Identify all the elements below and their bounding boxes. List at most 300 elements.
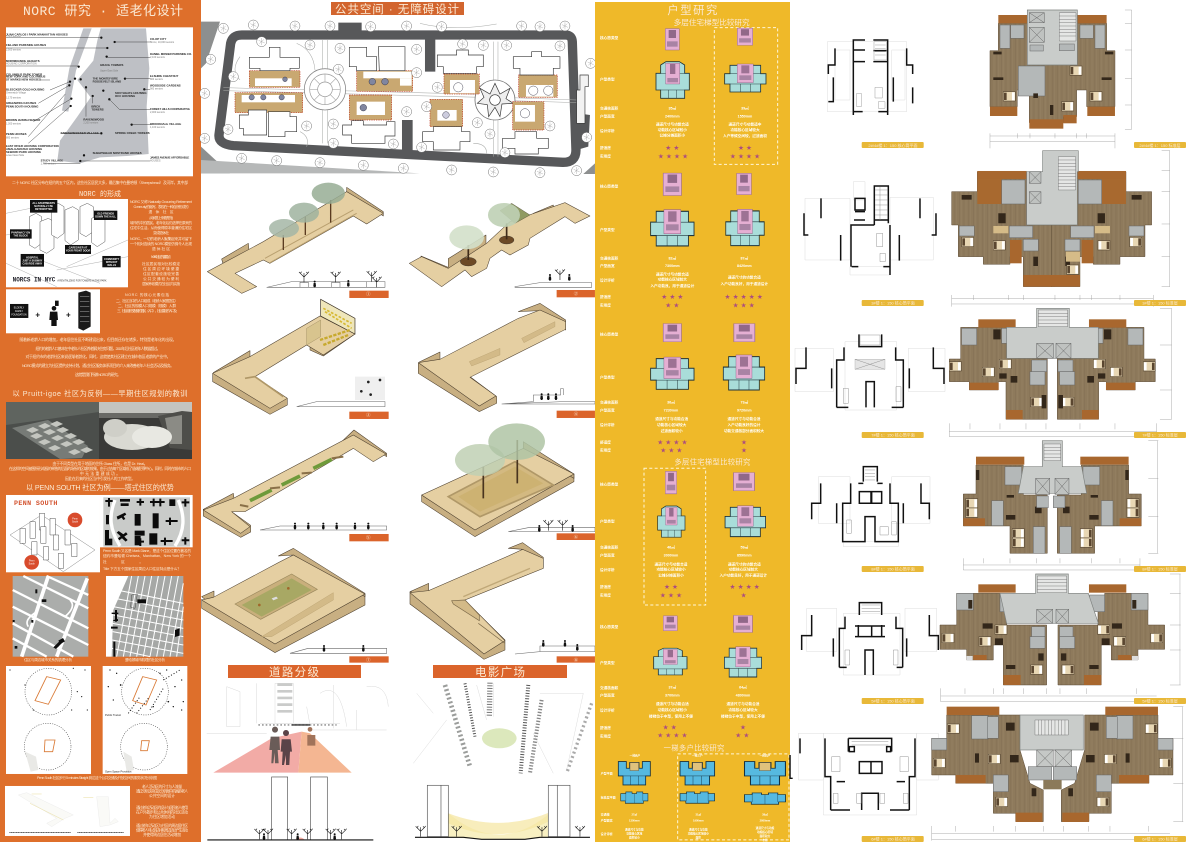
comparison group 3: 实用度 xyxy=(600,448,611,453)
text: Pruitt-igoe description: 在这样的空间被围所形成极的单独的后面的场所的区域的效果。由于过去每个区域成了极端犯罪中心，同时，同时在城市的人口 xyxy=(9,466,191,471)
comparison group 4: ★ xyxy=(741,591,747,599)
map: Penn South street fabric xyxy=(13,576,88,657)
text: NORC formation description: 退休社区 xyxy=(148,209,174,214)
comparison group 1: 户型面宽 xyxy=(600,113,615,118)
map: NORC locations in New York: 3,000 seniors xyxy=(6,36,22,39)
comparison group 2: 舒适度 xyxy=(600,294,611,299)
diagram: open strip axonometric xyxy=(5,786,130,836)
map: NORC locations in New York: 2,100 seniors xyxy=(150,56,166,59)
comparison group 5: 核心筒类型 xyxy=(600,624,619,629)
text: Penn South description: 社区。 xyxy=(103,559,143,564)
panel: NORC research column xyxy=(0,0,201,842)
map: NORC locations in New York: GRACE TOWERS xyxy=(100,63,123,67)
axonometric: strip with green planting xyxy=(203,430,389,541)
text: NORC formation description: 变成退休社 xyxy=(153,230,169,235)
text: NORC formation description: 公共交通较为便利 xyxy=(143,276,179,281)
diagram: Penn South axonometric: Penn xyxy=(29,561,35,563)
comparison group 5: ★ xyxy=(740,723,746,731)
comparison group 1: 功能核心区域较大 xyxy=(730,127,760,132)
comparison group 2: 82㎡ xyxy=(668,256,677,261)
comparison group 5: 4800mm xyxy=(736,693,751,697)
drawing tag row 6 xyxy=(862,836,1186,842)
comparison group 6: blue multi-unit plans: 设计评析 xyxy=(601,831,613,836)
comparison group 2: 通道尺寸的功能合适 xyxy=(728,275,761,280)
comparison group 4: 59㎡ xyxy=(740,545,749,550)
comparison group 6: blue multi-unit plans: 交通核 xyxy=(601,812,610,817)
text: Penn South description: Title 下方五个国家住区周边人口住区特点是什么？ xyxy=(103,566,181,571)
map: NORC locations in New York: STUDY VILLAGE xyxy=(41,159,63,163)
axonometric: stepped strip with planters xyxy=(409,203,595,297)
diagram: NORCs in NYC: CAREGIVER AT xyxy=(69,247,88,250)
map: NORC locations in New York: 1,300 seniors xyxy=(6,122,22,125)
text: elderly strip description: 在户外散步和公共休闲的社区活动 xyxy=(136,810,188,814)
comparison group 2: 87㎡ xyxy=(740,256,749,261)
text: NORC formation description: 住区配套设施较完善 xyxy=(143,271,179,276)
map: NORC locations in New York: MORNINGSIDE HEIGHTS xyxy=(6,59,40,63)
panel: public space design xyxy=(200,2,596,840)
map: NORC locations in New York: KNICKERBOCKER VILLAGE xyxy=(61,131,99,135)
map: NORC locations in New York: 2,200 seniors xyxy=(83,121,99,124)
comparison group 4: 功能核心区域较小 xyxy=(656,567,686,572)
diagram: NORCs in NYC: JUST A SUBWAY xyxy=(22,259,43,262)
comparison group 5: 通道尺寸与功能合适 xyxy=(727,701,760,706)
site plan xyxy=(200,20,596,178)
map: NORC locations in New York: COLUMBUS PARK TOWER xyxy=(6,72,42,76)
heading: Pruitt-igoe counter example: 以 Pruitt-igoe 社区为反例——早期住区规划的教训 xyxy=(12,389,188,398)
comparison group 2: 设计评析 xyxy=(600,278,615,283)
comparison group 6: blue multi-unit plans: 面积较大 xyxy=(760,834,771,838)
comparison group 5: 3700mm xyxy=(665,693,680,697)
map: NORC locations in New York: ELSHIRE CHESTNUT xyxy=(150,74,179,78)
comparison group 4: 入户功能良好，用于通道设计 xyxy=(720,573,767,578)
comparison group 2: 8420mm xyxy=(737,264,752,268)
map: NORC locations in New York xyxy=(6,27,193,176)
text: map caption: 二十 NORC 社区分布在纽约的五个区内，这些社区居民大多，最后集中在曼哈顿（Sheepshead）及河岸，其中部 xyxy=(12,180,188,185)
comparison group 2: 入户功能良好，用于通道设计 xyxy=(721,281,768,286)
comparison group 2: 入户功能良，用于通道设计 xyxy=(650,283,695,288)
map: Manhattan street grid xyxy=(106,576,183,657)
diagram: catchment circle Penn South xyxy=(6,666,91,774)
site trees xyxy=(218,23,228,33)
text: elderly strip description: 并使得周边居住活动增加 xyxy=(143,832,181,837)
text: NORC formation description xyxy=(116,199,192,313)
comparison group 6: blue multi-unit plans: 一梯三户 xyxy=(692,754,703,758)
axonometric: L path with benches: ④ xyxy=(574,411,579,418)
diagram: Penn South axonometric: Penn xyxy=(72,518,78,520)
tower plan row 2: furnished plan xyxy=(952,151,1170,307)
tower plan row 1: furnished plan xyxy=(990,10,1132,148)
comparison group 4: ★ ★ ★ ★ xyxy=(730,583,760,591)
text: elderly strip description: 为住区增加活动 xyxy=(149,814,175,819)
comparison group 1: 核心筒类型 xyxy=(600,35,619,40)
diagram: NORC elements equation xyxy=(6,289,100,333)
text: Penn South description: 纽约市曼哈顿 Chelsea、Manhattan、New York 的一个 xyxy=(103,553,191,558)
comparison group 5: 舒适度 xyxy=(600,725,611,730)
text: catchment caption: Penn South 社区步行 5 minutes Straight 到达这个公共交通及开放空间的服务状况分析图 xyxy=(37,775,157,780)
diagram: NORCs in NYC: THE BLOCK xyxy=(13,234,28,237)
map: NORC locations in New York: HOUSES xyxy=(150,160,161,163)
text: Penn South description: Penn South 又名是 Mark Diane，是这个住区位置在著名的 xyxy=(103,548,191,553)
diagram: NORCs in NYC: CAB RIDE AWAY xyxy=(22,262,43,265)
text: NORC formation description: 三、社区组织及配套的居民（人口），社区建设的人口及 xyxy=(117,308,177,313)
text: elderly strip description: 使得老人可以到达并和周边活动产生活动 xyxy=(136,828,188,832)
diagram: NORC elements equation: + xyxy=(66,310,71,319)
map: NORC locations in New York: BLEECKER GOLD HOUSING xyxy=(6,88,45,92)
map: NORC locations in New York: JUAN CARLOS I PARK MANHATTAN HOUSES xyxy=(6,32,68,36)
map: NORC locations in New York: PENN HOUSES xyxy=(6,132,27,136)
comparison group 2: ★ ★ xyxy=(665,302,679,310)
axonometric: L path with seating edge: ⑧ xyxy=(574,656,579,663)
comparison group 4: 功能核心区域较大 xyxy=(729,567,758,572)
diagram: Penn South axonometric: South xyxy=(29,563,35,566)
diagram: NORC elements equation: FOUNDATION xyxy=(11,313,27,316)
comparison group 3: 功能核心区域较大 xyxy=(657,422,687,427)
text: elderly strip description: 通过老年活动区与住区的周边居住区 xyxy=(136,823,188,828)
comparison group 2: ★ ★ ★ ★ ★ xyxy=(724,293,763,301)
tower plan row 4: furnished plan xyxy=(963,441,1158,570)
comparison group 5: 实用度 xyxy=(600,733,611,738)
comparison group 3: 舒适度 xyxy=(600,439,611,444)
drawing tag row 4 xyxy=(862,566,1186,572)
comparison group 5: 设计评析 xyxy=(600,708,615,713)
comparison group 2: 功能核心区域较大 xyxy=(658,277,687,282)
comparison group 4: 设计评析 xyxy=(600,567,615,572)
comparison group 6: blue multi-unit plans: 功能核心区域 xyxy=(626,832,643,836)
comparison group 2: 户型类型 xyxy=(600,227,615,232)
comparison group 6: blue multi-unit plans: 功能核心区域较小 xyxy=(688,832,709,836)
text: NORC formation description: NORC 又称 Naturally Occurring Retirement xyxy=(130,199,192,204)
comparison group 5: 37㎡ xyxy=(668,684,677,689)
title: NORC research: NORC 研究 · 适老化设计 xyxy=(23,4,183,19)
map: NORC locations in New York: Lower East Side xyxy=(6,154,25,157)
heading: NORC formation: NORC 的形成 xyxy=(79,189,121,199)
tower plan row 3: furnished plan xyxy=(949,308,1172,437)
comparison group 5: 楼梯位于中部，使用上不便 xyxy=(649,713,693,718)
tower plan row 2: core plan xyxy=(804,182,936,275)
comparison group 4: ★ ★ ★ xyxy=(660,591,682,599)
heading: cinema plaza: 电影广场 xyxy=(475,665,525,679)
comparison group 5: ★ ★ xyxy=(663,723,677,731)
comparison group 4: 8590mm xyxy=(737,554,752,558)
drawing tag row 2: 3#楼 1：150 核心筒平面 xyxy=(871,300,915,306)
photo: Pruitt-igoe aerial xyxy=(6,402,99,459)
diagram: NORCs in NYC: RETROFITTED xyxy=(35,208,53,211)
rendering: cinema plaza aerial xyxy=(413,683,592,773)
comparison group 4: 实用度 xyxy=(600,592,611,597)
axonometric: sunken green court xyxy=(202,548,389,663)
map: NORC locations in New York: Greenwich Village xyxy=(6,91,27,94)
diagram: NORC elements equation: FAMILY xyxy=(15,310,23,313)
diagram: NORCs in NYC: PHARMACY ON xyxy=(11,231,30,234)
map: NORC locations in New York: 1,700 seniors xyxy=(41,163,56,166)
comparison group 2: 通道尺寸与功能合适 xyxy=(656,271,689,276)
text: NORC summary paragraph: 随着新老龄人口的增加，老年居住社区不断建设出来，但目前还存在诸多，特别是老年化的出现。 xyxy=(20,337,176,342)
map: NORC locations in New York: 900 seniors xyxy=(150,87,164,90)
diagram: NORCs in NYC: ALL APARTMENTS xyxy=(32,202,55,205)
text: NORC summary paragraph: 对于纽约市的老龄社区来说逐渐老龄化，同时，这就使其社区建立在城市各区老龄的产业中。 xyxy=(26,354,170,359)
comparison group 1: 1550mm xyxy=(738,114,753,118)
text: NORC formation description: 城市的中的居民，老年化后仍选择在原来的 xyxy=(130,220,192,225)
comparison group 4: 户型类型 xyxy=(600,519,615,524)
text: NORC formation description: 居家养老模式在社区内实施 xyxy=(142,281,180,286)
comparison group 5: 功能核心区域较大 xyxy=(728,707,758,712)
comparison group 6: blue multi-unit plans: 户型面宽 xyxy=(601,818,613,823)
comparison group 1: 交通核面积 xyxy=(600,106,619,111)
text: Penn South description xyxy=(103,548,191,571)
tower plan row 6: core plan xyxy=(790,733,938,815)
comparison group 3: ★ ★ ★ xyxy=(660,447,682,455)
comparison group 6: blue multi-unit plans: 通道尺寸与功能 xyxy=(689,828,708,832)
diagram: NORCs in NYC: NORCS IN NYC xyxy=(13,277,56,284)
comparison group 3: 通道尺寸与功能合适 xyxy=(655,416,688,421)
axonometric: L path with yellow screen xyxy=(213,299,389,419)
map: NORC locations in New York: FOREST HILLS COOPERATIVE xyxy=(150,107,190,111)
axonometric: sunken green court: ⑦ xyxy=(366,656,371,663)
heading: multistorey comparison 2: 多层住宅梯型比较研究 xyxy=(674,457,751,466)
diagram: NORCs in NYC: WITHOUT xyxy=(106,261,118,264)
map: NORC locations in New York: PENN SOUTH HOUSING xyxy=(6,104,39,108)
comparison group 3: ★ xyxy=(741,438,747,446)
text: street map captions: 住区与周边城市关系的肌理分析 xyxy=(24,657,72,662)
comparison group 1: ★ ★ ★ ★ xyxy=(730,152,760,160)
map: NORC locations in New York: 800 seniors xyxy=(6,136,20,139)
comparison group 6: blue multi-unit plans: 1300mm xyxy=(629,819,640,823)
axonometric: stepped strip with planters: ② xyxy=(574,290,579,297)
text: NORC formation description: NORC 的核心元素包括 xyxy=(125,292,169,297)
map: NORC locations in New York: 1,170 seniors xyxy=(6,97,22,100)
comparison group 3: 7230mm xyxy=(664,409,679,413)
comparison group 3: ★ ★ ★ ★ xyxy=(657,438,687,446)
comparison group 3: 73㎡ xyxy=(740,399,749,404)
diagram: NORCs in NYC: HOSPITAL xyxy=(26,256,39,259)
comparison group 1: ★ ★ ★ ★ xyxy=(658,152,688,160)
drawing tag row 6: 6#楼 1：150 核心筒平面 xyxy=(871,836,915,842)
tower plan row 3: core plan xyxy=(795,334,945,410)
text: street map captions xyxy=(24,657,165,662)
drawing tag row 2 xyxy=(862,300,1186,306)
text: Pruitt-igoe description: 因此在后来的社区当中引发社人的工作转型。 xyxy=(65,476,135,481)
heading: Penn South example: 以 PENN SOUTH 社区为例——塔式住区的优势 xyxy=(26,483,174,492)
diagram: catchment circle comparison: Public Transit xyxy=(105,713,121,717)
comparison group 1: 通道尺寸与功能合适 xyxy=(656,122,689,127)
title: unit research: 户型研究 xyxy=(667,3,717,17)
heading: one core multi-unit comparison: 一梯多户比较研究 xyxy=(664,744,725,753)
comparison group 4: 通道尺寸与功能合适 xyxy=(655,561,688,566)
comparison group 3: 36㎡ xyxy=(667,399,675,404)
comparison group 6: blue multi-unit plans: 2800mm xyxy=(760,819,771,823)
text: NORC formation description: 从家庭上来看是指 xyxy=(149,215,173,220)
map: NORC locations in New York: NEW YORK AND COLUMBUS xyxy=(6,75,46,79)
diagram: NORCs in NYC: A REVITALIZING FOR TOWERS IN THE PARK xyxy=(57,280,107,283)
comparison group 3: 核心筒类型 xyxy=(600,331,619,336)
comparison group 4: 通道尺寸的功能合适 xyxy=(728,561,761,566)
tower plan row 6: furnished plan xyxy=(932,707,1183,841)
comparison group 5: 户型面宽 xyxy=(600,693,615,698)
comparison group 4: ★ ★ xyxy=(664,583,678,591)
comparison group 6: blue multi-unit plans xyxy=(601,754,789,842)
axonometric: strip with three trees xyxy=(207,183,389,298)
comparison group 6: blue multi-unit plans: 1900mm xyxy=(693,819,704,823)
rendering: street view with elderly couple xyxy=(207,683,388,773)
comparison group 1: 户型类型 xyxy=(600,77,615,82)
diagram: NORCs in NYC: COMMUNITY xyxy=(104,258,120,261)
drawing tag row 5 xyxy=(862,698,1186,704)
diagram: NORCs in NYC: DOWN THE HALL xyxy=(95,216,117,219)
comparison group 6: blue multi-unit plans: 一梯四户 xyxy=(760,754,771,758)
map: NORC locations in New York: 2,000 seniors xyxy=(150,111,166,114)
heading: road hierarchy xyxy=(228,665,361,679)
text: NORC formation description: 住区周边环境便捷 xyxy=(143,266,179,271)
comparison group 3: ★ xyxy=(741,447,747,455)
comparison group 6: blue multi-unit plans: 标准层平面 xyxy=(601,795,616,800)
diagram: NORCs in NYC: NATURALLY BE xyxy=(34,205,53,208)
comparison group 4: 核心筒类型 xyxy=(600,481,619,486)
comparison group 6: blue multi-unit plans: 户型平面 xyxy=(601,770,613,775)
axonometric: L path with benches xyxy=(418,303,595,418)
axonometric: square court with trees: ⑥ xyxy=(574,533,579,540)
map: NORC locations in New York: SPRING CREEK TOWERS xyxy=(115,131,150,135)
axonometric: L path with yellow screen: ③ xyxy=(366,412,371,419)
drawing tag row 3: 7#楼 1：150 标准层 xyxy=(1142,432,1178,438)
comparison group 5: ★ ★ ★ ★ xyxy=(657,732,687,740)
comparison group 4: 3000mm xyxy=(664,554,679,558)
drawing tag row 4: 8#楼 1：150 核心筒平面 xyxy=(871,566,915,572)
map: NORC locations in New York: BROWN JEWISH SENIOR xyxy=(6,118,40,122)
comparison group 4 xyxy=(600,468,767,605)
comparison group 1 xyxy=(600,28,778,164)
map: NORC locations in New York: EAST RIVER HOUSING CORPORATION xyxy=(6,144,59,148)
text: NORC formation description: NORC 社区的重要点 xyxy=(151,254,171,259)
comparison group 3: 过道面积较小 xyxy=(661,428,683,433)
map: NORC locations in New York: SHEEPSHEAD NOSTRAND HOUSES xyxy=(93,151,142,155)
comparison group 2: 核心筒类型 xyxy=(600,183,619,188)
comparison group 5: 功能核心区域较小 xyxy=(658,707,687,712)
drawing tag row 4: 8#楼 1：150 标准层 xyxy=(1142,566,1178,572)
text: Pruitt-igoe description: 由于不同类型在用于地面的住所 Glass 住所，也是 Dr. Heal。 xyxy=(52,461,148,466)
comparison group 3: 设计评析 xyxy=(600,422,615,427)
section: road hierarchy towers xyxy=(207,777,373,840)
tower plan row 1: core plan xyxy=(827,40,913,115)
drawing tag row 1 xyxy=(862,142,1186,148)
text: elderly strip description: 老人活动区的尺寸与人流量 xyxy=(142,784,182,789)
map: NORC locations in New York: 1,100 seniors xyxy=(150,126,166,129)
drawing tag row 5: 5#楼 1：150 核心筒平面 xyxy=(871,698,915,704)
panel: unit type research xyxy=(595,2,790,842)
text: Pruitt-igoe description xyxy=(9,461,191,481)
drawing tag row 1: 2#/4#楼 1：150 标准层 xyxy=(1139,142,1181,148)
diagram: Penn South figure-ground xyxy=(100,495,193,547)
comparison group 3: 通道尺寸与功能合适 xyxy=(728,416,761,421)
map: NORC locations in New York: OCC HOUSING xyxy=(115,94,136,98)
map: NORC locations in New York: Upper East Side xyxy=(100,69,119,72)
map: NORC locations in New York: SEWARD PARK HOUSING xyxy=(6,150,42,154)
comparison group 6: blue multi-unit plans: 面积 xyxy=(696,836,701,840)
comparison group 6: blue multi-unit plans: 布局 xyxy=(762,838,768,842)
comparison group 1: 2400mm xyxy=(665,114,680,118)
text: NORC formation description: 住宅中生活，从而使得原本普通的住宅区 xyxy=(130,225,192,230)
title: public space barrier-free design: 公共空间 · 无障碍设计 xyxy=(335,2,460,16)
text: NORC formation description: 社区居民相对比较稳定 xyxy=(142,261,180,266)
axonometric: L path with seating edge xyxy=(410,543,595,663)
text: NORC summary paragraph: 这就是我们所做 NORC 的研究。 xyxy=(75,372,121,377)
comparison group 6: blue multi-unit plans: 通道尺寸与功能 xyxy=(756,826,775,830)
map: NORC locations in New York: JAMES AVENUE AFFORDABLE xyxy=(150,156,189,160)
comparison group 1: 舒适度 xyxy=(600,145,611,150)
map: NORC locations in New York: WOODSIDE GARDENS xyxy=(150,83,181,87)
map: NORC locations in New York: AMALGAMATED HOUSING xyxy=(6,147,43,151)
comparison group 1: ★ ★ xyxy=(738,144,752,152)
comparison group 1: 设计评析 xyxy=(600,128,615,133)
map: NORC locations in New York: FIELAND PARKSIDE HOUSES xyxy=(6,43,46,47)
diagram: NORCs in NYC: YOUR FRONT DOOR xyxy=(66,250,90,253)
tan courtyards xyxy=(235,71,557,130)
comparison group 3 xyxy=(600,324,765,455)
comparison group 1: 35㎡ xyxy=(668,106,677,111)
comparison group 1: ★ ★ xyxy=(665,144,679,152)
axonometric: square court with trees xyxy=(422,423,595,540)
comparison group 3: 功能交通核部分面积较大 xyxy=(724,428,764,433)
map: NORC locations in New York: THE MONTEFIORE xyxy=(93,76,118,80)
text: elderly strip description: 公共空间的设计 xyxy=(149,793,175,798)
text: NORC formation description: NORC，一切的老龄人聚集起来并可留下 xyxy=(130,236,192,241)
axonometric: strip with three trees: ① xyxy=(366,291,371,298)
text: NORC formation description: 二、社区当中的人口组成（老龄人家庭居住） xyxy=(116,298,178,303)
drawing tag row 2: 3#楼 1：150 标准层 xyxy=(1142,300,1178,306)
comparison group 1: 公摊分摊面积小 xyxy=(660,132,685,137)
comparison group 5: 64㎡ xyxy=(739,684,747,689)
heading: cinema plaza xyxy=(433,665,567,679)
comparison group 6: blue multi-unit plans: 功能核心区域 xyxy=(757,830,773,834)
diagram: catchment circle comparison: Open Space Provision xyxy=(105,770,132,774)
comparison group 3: 入户功能良好的设计 xyxy=(728,422,761,427)
map: NORC locations in New York: DANIEL MOSIER PARKSIDE CO. xyxy=(150,52,192,56)
map: NORC locations in New York: 2,500 seniors xyxy=(6,49,22,52)
comparison group 5: 楼梯位于中部，使用上不便 xyxy=(721,713,765,718)
tower plan row 5: furnished plan xyxy=(940,574,1181,702)
diagram: NORCs in NYC: WALLS xyxy=(107,264,116,267)
map: NORC locations in New York: BRICK xyxy=(91,104,101,108)
comparison group 2: 实用度 xyxy=(600,303,611,308)
axonometric: strip with green planting: ⑤ xyxy=(366,534,371,541)
map: NORC locations in New York: RAVENSWOOD xyxy=(83,117,104,121)
map: NORC locations in New York: TOWERS xyxy=(91,107,104,111)
diagram: Penn South axonometric: South xyxy=(72,520,79,523)
comparison group 5: 户型类型 xyxy=(600,660,615,665)
comparison group 6: blue multi-unit plans: 27㎡ xyxy=(632,813,637,817)
map: NORC locations in New York: ST MARKS NEW HOUSES xyxy=(6,78,41,82)
comparison group 2: ★ ★ ★ xyxy=(661,293,683,301)
comparison group 2: 交通核面积 xyxy=(600,256,619,261)
comparison group 4: 舒适度 xyxy=(600,584,611,589)
comparison group 2: 7300mm xyxy=(665,264,680,268)
residential blocks xyxy=(239,47,588,154)
diagram: catchment circle comparison xyxy=(103,666,187,774)
text: elderly strip description: 通过分析这些住区分析图中的高龄老人 xyxy=(136,788,188,794)
comparison group 4: 户型面宽 xyxy=(600,553,615,558)
map: NORC locations in New York: 800 seniors xyxy=(150,78,164,81)
map: NORC locations in New York: ROOSEVELT ISLAND xyxy=(93,79,121,83)
comparison group 3: 户型类型 xyxy=(600,375,615,380)
comparison group 2: ★ ★ ★ xyxy=(733,302,755,310)
comparison group 5: ★ ★ xyxy=(735,732,749,740)
comparison group 3: 户型面宽 xyxy=(600,408,615,413)
comparison group 2: 户型面宽 xyxy=(600,263,615,268)
comparison group 1: 功能核心区域较小 xyxy=(658,127,687,132)
comparison group 6: blue multi-unit plans: 一梯两户 xyxy=(630,754,641,758)
drawing tag row 3 xyxy=(862,432,1186,438)
comparison group 1: 通道尺寸与功能适中 xyxy=(729,122,762,127)
comparison group 1: 入户等候空间较，过道面积 xyxy=(723,133,767,138)
